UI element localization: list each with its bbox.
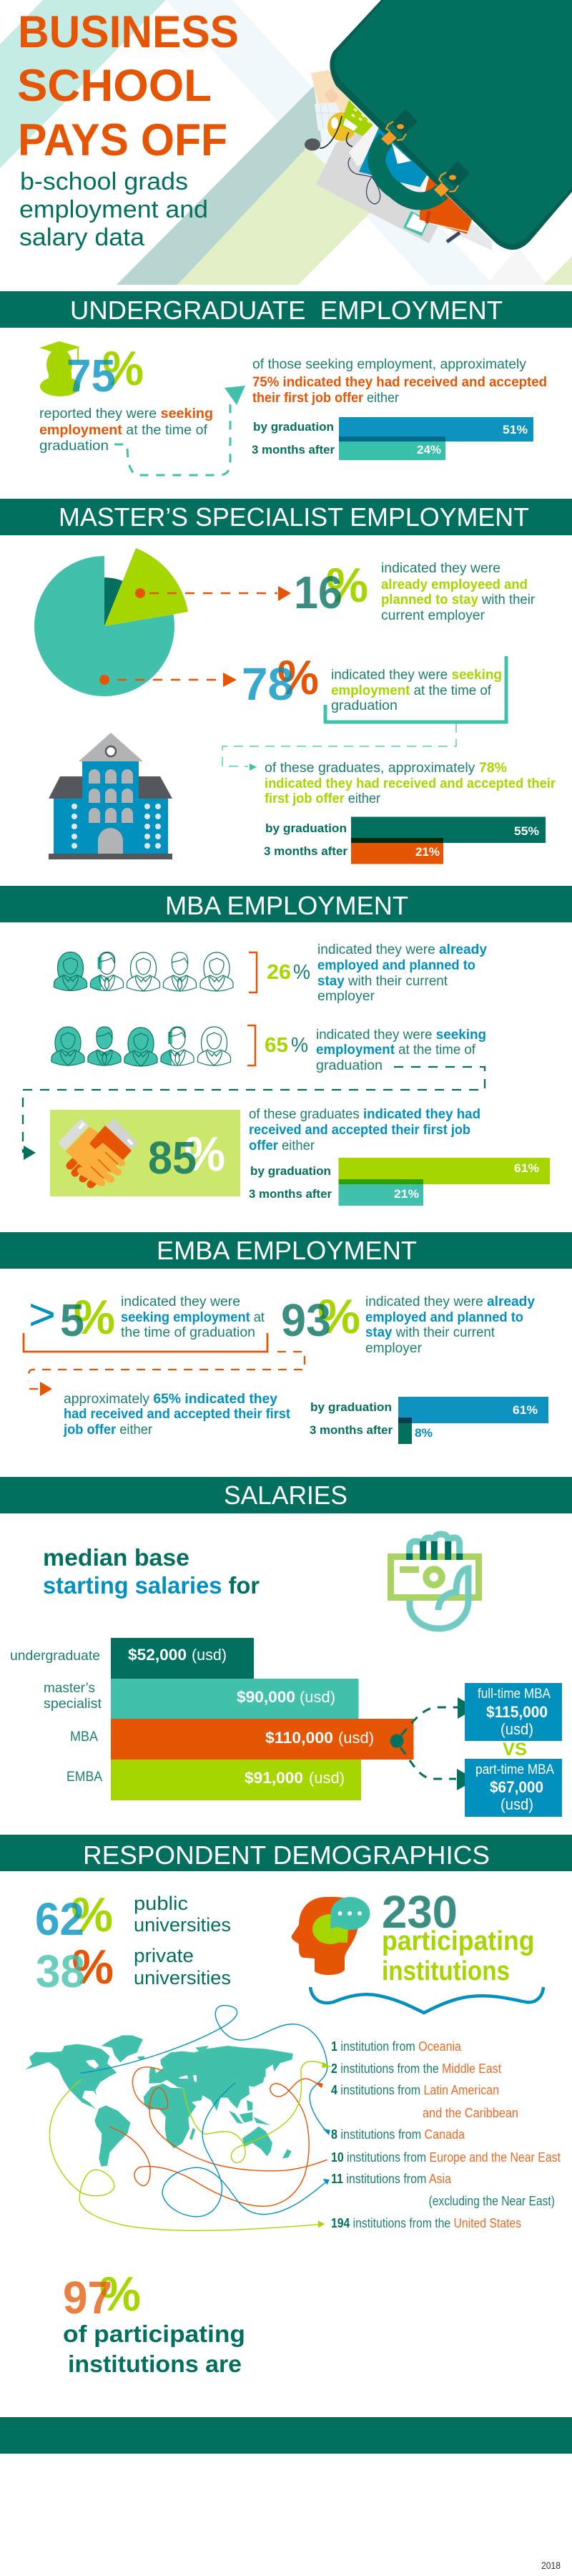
- list: institutions by region: 11 institutions from Asia: [331, 2172, 452, 2186]
- text: job offer: received and accepted their first job: [249, 1123, 470, 1138]
- panel: EMBA employment: [24, 1289, 548, 1444]
- text: job offer: of these graduates, approximately 78%: [265, 761, 507, 776]
- bar chart: undergraduate offers: 24%: [417, 443, 441, 457]
- bar chart: master's offers: 21%: [415, 845, 440, 859]
- text: seeking employment: indicated they were seeking: [331, 668, 502, 683]
- stat: 97% of participating institutions: institutions are: [68, 2351, 242, 2377]
- text: already employed: indicated they were already: [317, 942, 487, 957]
- heading: median base starting salaries: starting salaries for: [43, 1572, 260, 1599]
- title: PAYS OFF: [18, 115, 227, 165]
- stat: 97% of participating institutions: of participating: [63, 2321, 245, 2347]
- stat: 62% public universities: public: [134, 1893, 188, 1914]
- stat: 75%: [66, 341, 144, 401]
- bar chart: EMBA offers: 61%: [513, 1403, 538, 1417]
- stat: 78%: 78: [242, 658, 294, 710]
- text: job offer: [252, 357, 547, 406]
- panel: salaries: [10, 1534, 562, 1817]
- text: already employed: indicated they were already: [365, 1294, 535, 1309]
- arrow: pie to 16%: [135, 586, 291, 601]
- stat: 26%: 26: [267, 961, 291, 984]
- pictogram row: 26%: [54, 952, 233, 991]
- text: seeking employment: employment at the time of: [316, 1043, 476, 1058]
- text: already employed: [317, 942, 487, 1004]
- stat: 65%: 65: [265, 1034, 288, 1057]
- stat: 62% public universities: [35, 1888, 231, 1945]
- text: seeking employment: graduation: [316, 1058, 383, 1073]
- stat: 97% of participating institutions: [63, 2267, 245, 2377]
- stat: 16%: 16: [294, 567, 342, 618]
- stat: 65%: [265, 1034, 308, 1057]
- banner: undergraduate employment: [0, 291, 572, 328]
- box: part-time MBA: [465, 1759, 562, 1817]
- text: already employed: indicated they were: [381, 561, 500, 576]
- text: already employed: stay with their current: [365, 1325, 495, 1340]
- chart: salary bars: $110,000: [265, 1729, 333, 1747]
- icon: university building: [49, 733, 172, 859]
- banner: EMBA employment: EMBA EMPLOYMENT: [157, 1236, 417, 1265]
- chart: salary bars: $90,000: [237, 1688, 295, 1706]
- text: job offer: approximately 65% indicated they: [64, 1392, 277, 1407]
- stat: 62% public universities: universities: [134, 1914, 231, 1936]
- stat: 93%: [281, 1289, 360, 1346]
- text: seeking employment: employment at the time of: [331, 683, 492, 698]
- text: seeking employment: indicated they were: [121, 1294, 240, 1309]
- stat: more than 5%: %: [74, 1290, 115, 1345]
- banner: respondent demographics: [0, 1835, 572, 1871]
- bracket: [325, 656, 506, 722]
- stat: 230 participating institutions: participating: [382, 1926, 535, 1956]
- stat: 65%: %: [291, 1034, 308, 1057]
- chart: salary bars: [10, 1638, 413, 1800]
- banner: salaries: SALARIES: [224, 1480, 347, 1510]
- panel: master's specialist employment: [34, 548, 556, 864]
- box: part-time MBA: (usd): [500, 1795, 533, 1813]
- text: seeking employment: employment at the time of: [39, 423, 208, 438]
- stat: more than 5%: >: [29, 1290, 56, 1340]
- bar chart: MBA offers: by graduation: [250, 1164, 331, 1178]
- subtitle: employment and: [19, 196, 208, 223]
- text: already employed: [381, 561, 536, 623]
- stat: 62% public universities: 62: [35, 1893, 84, 1945]
- list: institutions by region: (excluding the Near East): [429, 2194, 555, 2208]
- box: handshake with 85%: 85: [148, 1132, 197, 1184]
- subtitle: b-school grads: [20, 168, 188, 195]
- arrow: pie to 78%: [99, 673, 237, 687]
- text: already employed: employed and planned to: [317, 958, 475, 973]
- list: institutions by region: 4 institutions from Latin American: [331, 2083, 499, 2097]
- heading: median base starting salaries: [43, 1544, 260, 1599]
- box: part-time MBA: part-time MBA: [475, 1762, 554, 1777]
- list: institutions by region: 2 institutions from the Middle East: [331, 2062, 501, 2076]
- banner: undergraduate employment: UNDERGRADUATE EMPLOYMENT: [70, 296, 503, 325]
- chart: salary bars: $52,000: [128, 1646, 187, 1664]
- list: institutions by region: and the Caribbean: [423, 2106, 518, 2120]
- bar chart: master's offers: by graduation: [265, 821, 347, 835]
- text: job offer: their first job offer either: [252, 391, 400, 406]
- pictogram row: 65%: [51, 1027, 230, 1066]
- stat: more than 5%: [29, 1290, 115, 1346]
- title: SCHOOL: [17, 61, 212, 111]
- chart: salary bars: $91,000: [245, 1769, 303, 1787]
- text: already employed: [365, 1294, 535, 1356]
- text: job offer: had received and accepted their first: [64, 1407, 291, 1422]
- bracket: [249, 952, 257, 992]
- box: handshake with 85%: [50, 1110, 240, 1196]
- box: part-time MBA: $67,000: [490, 1778, 543, 1796]
- bar chart: master's offers: 55%: [514, 824, 539, 838]
- text: seeking employment: graduation: [331, 698, 398, 713]
- list: institutions by region: 8 institutions from Canada: [331, 2127, 465, 2142]
- banner: EMBA employment: [0, 1232, 572, 1269]
- list: institutions by region: 1 institution from Oceania: [331, 2039, 462, 2054]
- stat: 97% of participating institutions: %: [99, 2267, 141, 2321]
- chart: salary bars: (usd): [300, 1688, 335, 1706]
- panel: undergraduate employment: [39, 341, 547, 475]
- text: job offer: of those seeking employment, approximately: [252, 357, 526, 372]
- box: full-time MBA: full-time MBA: [478, 1687, 551, 1702]
- label: vs: VS: [503, 1740, 527, 1760]
- bar chart: EMBA offers: 3 months after: [310, 1423, 393, 1437]
- stat: 75%: 75: [66, 350, 116, 401]
- list: institutions by region: [331, 2039, 561, 2230]
- bar chart: undergraduate offers: 51%: [503, 423, 528, 436]
- pie chart: [34, 548, 188, 696]
- stat: 16%: [294, 558, 368, 618]
- bracket: [247, 1025, 255, 1065]
- bar chart: EMBA offers: by graduation: [310, 1400, 392, 1414]
- text: seeking employment: the time of graduation: [121, 1325, 255, 1340]
- arrow: thin dashed link: [222, 723, 456, 771]
- bar chart: MBA offers: 61%: [514, 1161, 539, 1175]
- stat: 230 participating institutions: [382, 1886, 535, 1986]
- text: already employed: employer: [365, 1341, 423, 1356]
- chart: salary bars: MBA: [70, 1729, 98, 1745]
- list: institutions by region: 10 institutions from Europe and the Near East: [331, 2150, 561, 2165]
- icon: hand holding banknote: [390, 1534, 479, 1629]
- banner: respondent demographics: RESPONDENT DEMOGRAPHICS: [83, 1840, 490, 1870]
- chart: world map with connector lines: [25, 2006, 330, 2230]
- text: job offer: [249, 1107, 480, 1153]
- bar chart: MBA offers: [249, 1158, 550, 1206]
- stat: 230 participating institutions: institutions: [382, 1956, 510, 1986]
- text: already employed: already employeed and: [381, 577, 528, 592]
- stat: 230 participating institutions: 230: [382, 1886, 458, 1938]
- panel: MBA employment: [23, 942, 550, 1206]
- stat: more than 5%: 5: [60, 1294, 84, 1346]
- text: job offer: [63, 1392, 291, 1438]
- banner: master's specialist employment: MASTER’S SPECIALIST EMPLOYMENT: [59, 502, 529, 532]
- stat: 38% private universities: universities: [134, 1967, 231, 1989]
- chart: salary bars: (usd): [192, 1646, 227, 1664]
- text: already employed: stay with their current: [317, 974, 448, 989]
- heading: median base starting salaries: median base: [43, 1544, 189, 1571]
- stat: 38% private universities: 38: [36, 1946, 85, 1997]
- text: seeking employment: graduation: [39, 439, 109, 454]
- text: already employed: employed and planned to: [365, 1310, 523, 1325]
- title: [17, 7, 239, 165]
- title: BUSINESS: [18, 7, 239, 57]
- chart: salary bars: EMBA: [66, 1770, 102, 1785]
- text: job offer: first job offer either: [265, 791, 381, 806]
- text: seeking employment: indicated they were seeking: [316, 1028, 486, 1043]
- arrow: dashed link to handshake: [23, 1067, 485, 1160]
- stat: 38% private universities: [36, 1940, 231, 1997]
- arrow: dashed link to job offer text: [114, 386, 245, 475]
- text: seeking employment: [316, 1028, 486, 1073]
- chart: salary bars: undergraduate: [10, 1649, 100, 1664]
- text: job offer: of these graduates indicated they had: [249, 1107, 480, 1122]
- text: job offer: indicated they had received and accepted their: [265, 776, 556, 791]
- box: full-time MBA: [465, 1683, 562, 1741]
- bar chart: EMBA offers: 8%: [415, 1426, 433, 1440]
- stat: 97% of participating institutions: 97: [63, 2272, 112, 2323]
- header background: [0, 0, 572, 285]
- text: seeking employment: [121, 1294, 265, 1340]
- box: full-time MBA: (usd): [500, 1720, 533, 1738]
- box: handshake with 85%: %: [184, 1127, 225, 1181]
- footer banner: [0, 2417, 572, 2454]
- icon: head with speech bubbles: [292, 1897, 370, 1975]
- arrows: MBA split: [390, 1697, 476, 1790]
- stat: 16%: %: [326, 558, 368, 613]
- box: full-time MBA: $115,000: [486, 1703, 548, 1721]
- list: institutions by region: 194 institutions from the United States: [331, 2216, 521, 2230]
- banner: MBA employment: MBA EMPLOYMENT: [165, 891, 408, 920]
- stat: 26%: [267, 961, 310, 984]
- text: seeking employment: seeking employment at: [121, 1310, 265, 1325]
- year label: 2018: [541, 2560, 561, 2571]
- text: seeking employment: reported they were seeking: [39, 406, 213, 421]
- text: already employed: current employer: [381, 608, 485, 623]
- icon: graduate silhouette: [39, 341, 80, 396]
- banner: master's specialist employment: [0, 499, 572, 535]
- stat: 62% public universities: %: [72, 1888, 113, 1942]
- text: already employed: planned to stay with their: [381, 592, 536, 608]
- arrow: dashed link to job offer text: [29, 1352, 305, 1396]
- subtitle: salary data: [19, 224, 144, 251]
- text: job offer: [265, 761, 556, 806]
- subtitle: [19, 168, 208, 251]
- stat: 93%: 93: [281, 1294, 331, 1346]
- stat: 78%: %: [277, 650, 319, 705]
- stat: 75%: %: [102, 341, 144, 396]
- chart: salary bars: master’s: [44, 1681, 95, 1696]
- bar chart: master's offers: 3 months after: [264, 844, 347, 858]
- text: seeking employment: [331, 668, 502, 713]
- stat: 26%: %: [293, 961, 310, 984]
- chart: salary bars: (usd): [338, 1729, 374, 1747]
- banner: MBA employment: [0, 886, 572, 922]
- chart: salary bars: (usd): [309, 1769, 345, 1787]
- stat: 78%: [242, 650, 319, 710]
- chart: salary bars: specialist: [44, 1697, 102, 1712]
- text: job offer: offer either: [249, 1138, 315, 1153]
- text: job offer: 75% indicated they had received and accepted: [252, 375, 547, 390]
- bar chart: master's offers: [264, 817, 546, 864]
- bar chart: EMBA offers: [310, 1397, 548, 1444]
- bar chart: undergraduate offers: by graduation: [253, 420, 334, 434]
- bracket: [24, 1333, 267, 1352]
- text: already employed: employer: [317, 989, 375, 1004]
- banner: salaries: [0, 1477, 572, 1513]
- bar chart: MBA offers: 21%: [394, 1187, 419, 1201]
- stat: 38% private universities: private: [134, 1945, 194, 1966]
- panel: respondent demographics: [25, 1886, 561, 2377]
- bar chart: MBA offers: 3 months after: [249, 1187, 332, 1201]
- bar chart: undergraduate offers: 3 months after: [252, 443, 335, 457]
- icon: briefcase with spilled office items: [305, 0, 572, 250]
- stat: 93%: %: [317, 1289, 360, 1344]
- text: job offer: job offer either: [63, 1423, 153, 1438]
- text: seeking employment: [39, 406, 213, 454]
- bar chart: undergraduate offers: [252, 417, 533, 460]
- stat: 38% private universities: %: [72, 1940, 114, 1994]
- icon: handshake: [58, 1118, 138, 1184]
- brace: [310, 1987, 543, 2013]
